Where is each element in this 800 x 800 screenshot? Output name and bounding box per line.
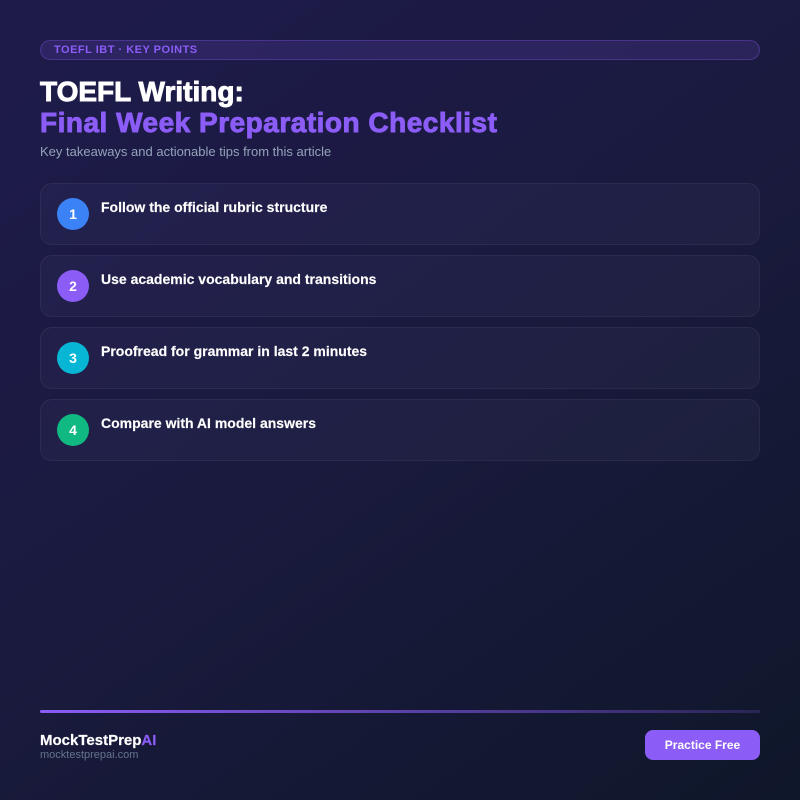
title: Final Week Preparation Checklist bbox=[40, 107, 497, 138]
point 1 text: Follow the official rubric structure bbox=[101, 199, 327, 215]
subtitle: Key takeaways and actionable tips from this article bbox=[40, 144, 331, 159]
icon: number 1 bbox=[57, 198, 89, 230]
footer accent bar bbox=[40, 710, 760, 713]
icon: number 1: 1 bbox=[69, 206, 77, 222]
panel: point 2 bbox=[40, 255, 760, 317]
brand name: MockTestPrepAI bbox=[40, 732, 156, 749]
icon: number 2: 2 bbox=[69, 278, 77, 294]
button: practice free bbox=[645, 730, 760, 760]
brand url: mocktestprepai.com bbox=[40, 749, 138, 761]
panel: point 1 bbox=[40, 183, 760, 245]
badge: TOEFL IBT · KEY POINTS bbox=[54, 44, 198, 56]
panel: point 4 bbox=[40, 399, 760, 461]
button: practice free: Practice Free bbox=[665, 738, 740, 752]
title bbox=[40, 76, 498, 138]
icon: number 2 bbox=[57, 270, 89, 302]
icon: number 3 bbox=[57, 342, 89, 374]
icon: number 4 bbox=[57, 414, 89, 446]
title: TOEFL Writing: bbox=[40, 76, 244, 107]
badge bbox=[40, 40, 760, 60]
panel: point 3 bbox=[40, 327, 760, 389]
point 3 text: Proofread for grammar in last 2 minutes bbox=[101, 343, 367, 359]
point 4 text: Compare with AI model answers bbox=[101, 415, 316, 431]
point 2 text: Use academic vocabulary and transitions bbox=[101, 271, 376, 287]
icon: number 3: 3 bbox=[69, 350, 77, 366]
icon: number 4: 4 bbox=[69, 422, 77, 438]
